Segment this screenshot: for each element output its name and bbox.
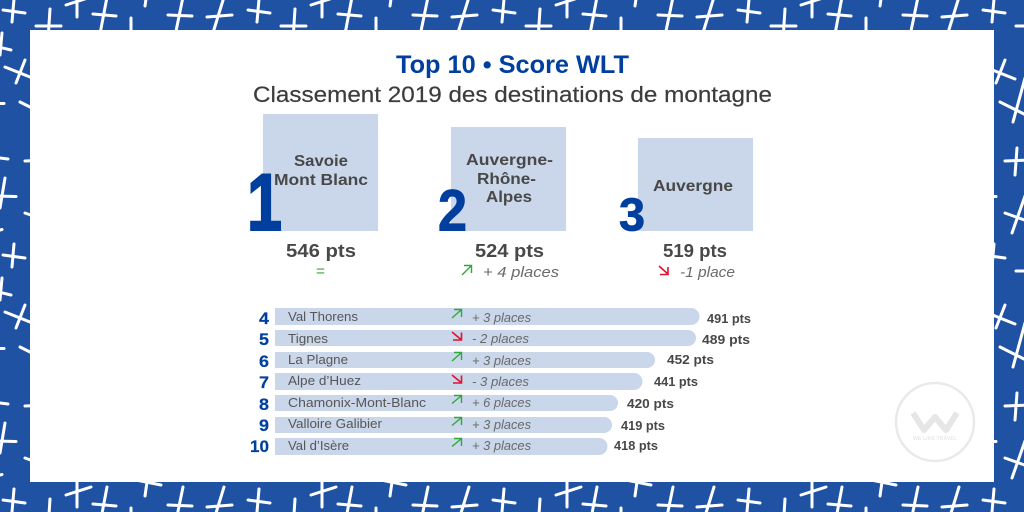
panel: podium rank 3: Auvergne — [653, 178, 733, 195]
icon: We Like Travel logo — [896, 383, 974, 461]
row: Val Thorens: 491 pts — [707, 311, 751, 326]
row: La Plagne — [259, 352, 714, 371]
row: Val Thorens: 4 — [259, 309, 270, 328]
row: Chamonix-Mont-Blanc — [259, 395, 674, 414]
row: Val Thorens — [259, 308, 751, 328]
row: La Plagne: + 3 places — [472, 353, 531, 368]
panel: podium rank 2 — [438, 127, 566, 281]
row: Chamonix-Mont-Blanc: Chamonix-Mont-Blanc — [288, 395, 427, 410]
panel: podium rank 3: -1 place — [680, 264, 735, 281]
row: Alpe d'Huez: - 3 places — [472, 374, 529, 389]
row: Tignes: - 2 places — [472, 331, 529, 346]
row: Val d'Isère — [250, 437, 658, 456]
row: Tignes: 489 pts — [702, 332, 750, 347]
row: La Plagne: 6 — [259, 352, 269, 371]
ranking list: places 4 to 10 — [250, 308, 751, 456]
panel: podium rank 1: 1 — [247, 158, 282, 248]
panel: podium rank 1: 546 pts — [286, 240, 356, 261]
panel: podium rank 1 — [247, 114, 378, 280]
panel: podium rank 2: 2 — [438, 178, 467, 244]
panel: podium rank 2: 524 pts — [475, 240, 544, 261]
panel: podium rank 1: = — [316, 263, 325, 280]
row: Val Thorens: Val Thorens — [288, 309, 358, 324]
row: Tignes: Tignes — [288, 331, 329, 346]
row: Alpe d'Huez — [259, 373, 698, 392]
panel: podium rank 2: Auvergne- — [466, 152, 553, 169]
panel: podium rank 3: 3 — [619, 188, 645, 240]
row: Valloire Galibier: Valloire Galibier — [288, 416, 383, 431]
row: Valloire Galibier: 419 pts — [621, 418, 665, 433]
row: La Plagne: La Plagne — [288, 352, 348, 367]
row: Val d'Isère: 418 pts — [614, 438, 658, 453]
row: Valloire Galibier: + 3 places — [472, 417, 531, 432]
row: Alpe d'Huez: 441 pts — [654, 374, 698, 389]
panel: podium rank 3: 519 pts — [663, 240, 727, 261]
row: Val d'Isère: + 3 places — [472, 438, 531, 453]
row: Valloire Galibier: 9 — [259, 416, 269, 435]
panel: podium rank 2: + 4 places — [483, 264, 560, 281]
row: Val d'Isère: Val d’Isère — [288, 438, 349, 453]
row: Val Thorens: + 3 places — [472, 310, 531, 325]
row: Chamonix-Mont-Blanc: 420 pts — [627, 396, 674, 411]
row: Tignes: 5 — [259, 330, 269, 349]
title: Top 10 • Score WLT — [396, 51, 629, 79]
row: Alpe d'Huez: Alpe d’Huez — [288, 373, 361, 388]
row: Chamonix-Mont-Blanc: 8 — [259, 395, 269, 414]
subtitle: Classement 2019 des destinations de montagne — [253, 82, 772, 107]
panel: podium rank 1: Mont Blanc — [274, 172, 368, 189]
panel: podium rank 3 — [619, 138, 753, 281]
icon: We Like Travel logo: WE LIKE TRAVEL — [913, 436, 957, 442]
panel: podium rank 1: Savoie — [294, 153, 348, 170]
row: Chamonix-Mont-Blanc: + 6 places — [472, 395, 531, 410]
panel: podium rank 2: Rhône- — [477, 171, 536, 188]
row: La Plagne: 452 pts — [667, 352, 714, 367]
row: Alpe d'Huez: 7 — [259, 373, 269, 392]
row: Valloire Galibier — [259, 416, 665, 435]
panel: podium rank 2: Alpes — [486, 189, 532, 206]
row: Val d'Isère: 10 — [250, 437, 269, 456]
row: Tignes — [259, 330, 750, 349]
